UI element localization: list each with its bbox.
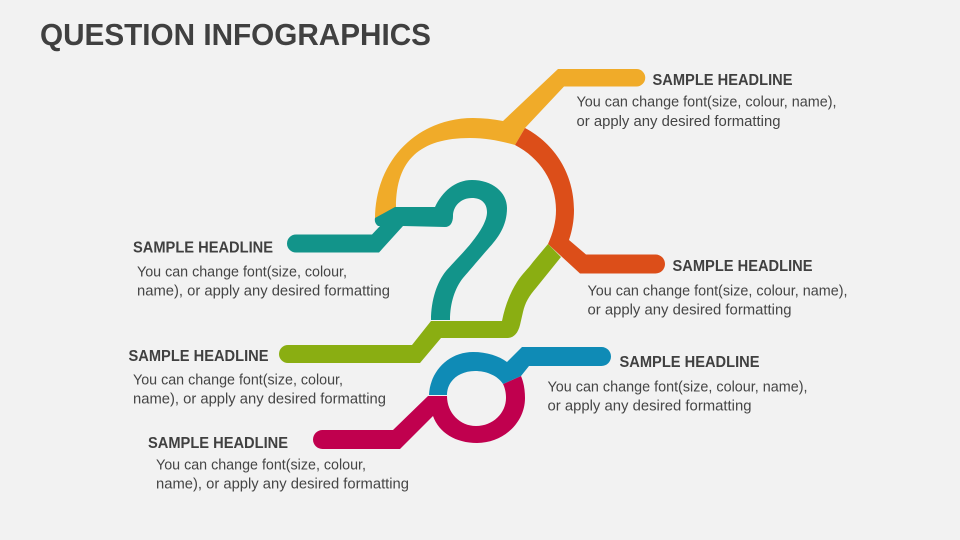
text block: blue callout: You can change font(size, colour, name), bbox=[548, 378, 808, 396]
text block: green callout bbox=[128, 348, 386, 408]
text block: blue callout: or apply any desired formatting bbox=[548, 398, 752, 414]
segment: yellow top arc bbox=[375, 69, 645, 219]
text block: green callout: name), or apply any desired formatting bbox=[133, 390, 386, 408]
text block: yellow callout bbox=[576, 72, 836, 130]
text block: yellow callout: You can change font(size, colour, name), bbox=[576, 94, 836, 110]
text block: teal callout: SAMPLE HEADLINE bbox=[133, 240, 273, 256]
text block: crimson callout: name), or apply any desired formatting bbox=[156, 476, 409, 492]
text block: orange callout bbox=[588, 258, 848, 318]
text block: blue callout bbox=[548, 354, 808, 414]
text block: orange callout: or apply any desired formatting bbox=[588, 302, 792, 318]
segment: orange right arc bbox=[515, 128, 665, 274]
segment: green stem bbox=[279, 244, 561, 363]
text block: blue callout: SAMPLE HEADLINE bbox=[620, 354, 760, 371]
text block: crimson callout: You can change font(size, colour, bbox=[156, 456, 366, 474]
question mark graphic bbox=[279, 69, 665, 449]
text block: teal callout bbox=[133, 240, 390, 300]
text block: crimson callout bbox=[148, 435, 409, 492]
text block: teal callout: name), or apply any desired formatting bbox=[137, 282, 390, 300]
text block: yellow callout: SAMPLE HEADLINE bbox=[652, 72, 792, 89]
text block: orange callout: SAMPLE HEADLINE bbox=[672, 258, 812, 275]
text block: yellow callout: or apply any desired formatting bbox=[576, 113, 780, 130]
segment: crimson lower dot bbox=[313, 376, 525, 449]
segment: blue upper dot bbox=[429, 347, 611, 395]
text block: crimson callout: SAMPLE HEADLINE bbox=[148, 435, 288, 452]
text block: orange callout: You can change font(size, colour, name), bbox=[588, 282, 848, 300]
text block: teal callout: You can change font(size, colour, bbox=[137, 264, 347, 280]
text block: green callout: SAMPLE HEADLINE bbox=[128, 348, 268, 365]
segment: teal inner hook bbox=[287, 180, 507, 320]
title: QUESTION INFOGRAPHICS bbox=[40, 17, 431, 52]
text block: green callout: You can change font(size, colour, bbox=[133, 372, 343, 388]
